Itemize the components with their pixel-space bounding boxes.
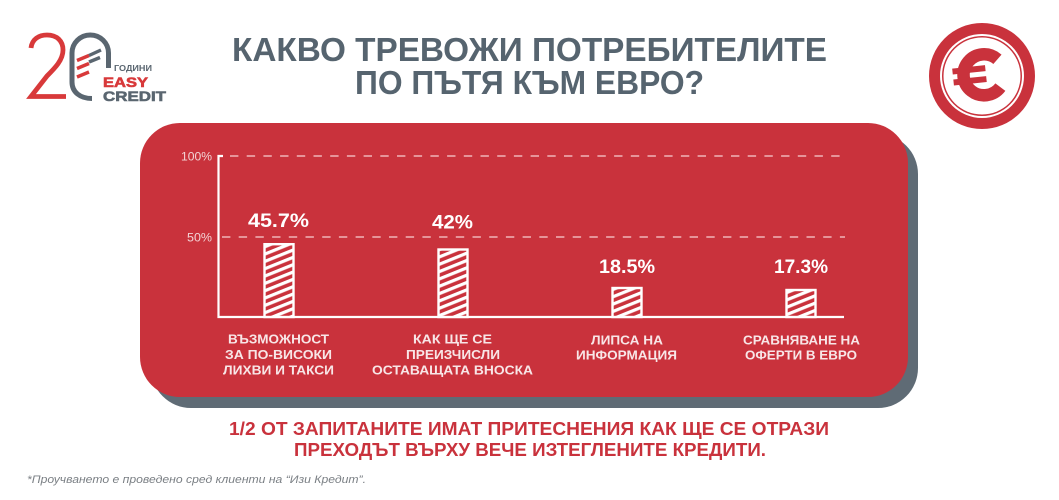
label: higher rates and fees: [223, 332, 334, 378]
label: lack of information: ЛИПСА НА: [591, 334, 663, 348]
title: [232, 31, 827, 101]
logo numeral 0 arch: [72, 35, 108, 98]
bar: 17.3%: [774, 257, 828, 317]
label: remaining instalment: ПРЕИЗЧИСЛИ: [406, 348, 500, 362]
label: comparing offers: ОФЕРТИ В ЕВРО: [745, 348, 857, 362]
bar: 42%: 42%: [432, 212, 473, 234]
label: remaining instalment: КАК ЩЕ СЕ: [413, 332, 492, 346]
callout: ПРЕХОДЪТ ВЪРХУ ВЕЧЕ ИЗТЕГЛЕНИТЕ КРЕДИТИ.: [294, 440, 766, 460]
category labels: [223, 332, 860, 378]
bar: 18.5%: 18.5%: [599, 257, 655, 278]
axis labels: 100%: [181, 150, 212, 164]
label: lack of information: [576, 334, 677, 362]
footnote: *Проучването е проведено сред клиенти на “Изи Кредит”.: [27, 474, 366, 486]
icon: euro sign: [951, 53, 1001, 98]
label: comparing offers: [743, 334, 860, 362]
logo numeral 2: [31, 35, 66, 96]
label: higher rates and fees: ЛИХВИ И ТАКСИ: [223, 364, 334, 378]
bar: 18.5%: [599, 257, 655, 317]
callout: [229, 419, 829, 460]
logo text: EASY: [103, 74, 149, 90]
axes: [218, 156, 844, 317]
label: higher rates and fees: ВЪЗМОЖНОСТ: [228, 332, 329, 346]
label: higher rates and fees: ЗА ПО-ВИСОКИ: [225, 348, 332, 362]
logo text: [103, 64, 167, 104]
icon: euro coin: [929, 23, 1035, 129]
logo stripes: [77, 50, 101, 77]
gridlines: [222, 156, 845, 237]
label: remaining instalment: [372, 332, 533, 378]
label: lack of information: ИНФОРМАЦИЯ: [576, 348, 677, 362]
logo text: CREDIT: [103, 88, 167, 104]
axis labels: 50%: [187, 230, 212, 244]
bar: 45.7%: [248, 211, 309, 317]
title: КАКВО ТРЕВОЖИ ПОТРЕБИТЕЛИТЕ: [232, 31, 827, 68]
panel background: [140, 123, 908, 397]
callout: 1/2 ОТ ЗАПИТАНИТЕ ИМАТ ПРИТЕСНЕНИЯ КАК ЩЕ СЕ ОТРАЗИ: [229, 419, 829, 439]
bar chart: [181, 150, 845, 317]
axis labels: [181, 150, 212, 244]
logo text: ГОДИНИ: [114, 64, 152, 73]
bar: 42%: [432, 212, 473, 317]
panel shadow: [151, 134, 918, 408]
label: comparing offers: СРАВНЯВАНЕ НА: [743, 334, 860, 348]
label: remaining instalment: ОСТАВАЩАТА ВНОСКА: [372, 364, 533, 378]
title: ПО ПЪТЯ КЪМ ЕВРО?: [355, 64, 704, 101]
logo: 20 years Easy Credit: [31, 35, 167, 104]
bar: 45.7%: 45.7%: [248, 211, 309, 232]
bar: 17.3%: 17.3%: [774, 257, 828, 278]
panel: survey chart: [140, 123, 918, 408]
